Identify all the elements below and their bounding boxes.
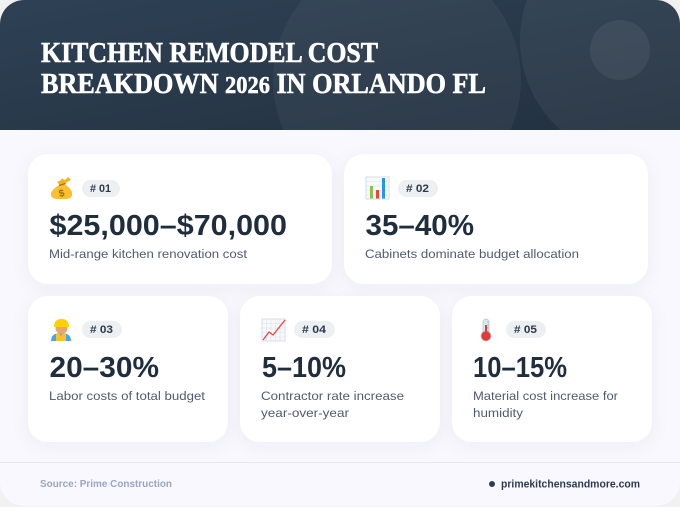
stat description: Mid-range kitchen renovation cost — [49, 247, 248, 261]
title: BREAKDOWN 2026 IN ORLANDO FL — [41, 69, 486, 100]
title: KITCHEN REMODEL COST — [41, 38, 378, 69]
panel: card 01 — [50, 177, 304, 284]
icon: construction worker — [51, 319, 71, 341]
badge 03 — [82, 321, 122, 338]
stat description: Contractor rate increase — [261, 389, 404, 403]
source note: Source: Prime Construction — [40, 478, 172, 490]
website: primekitchensandmore.com — [501, 478, 640, 490]
stat value: 35–40% — [366, 210, 474, 242]
icon: bar chart — [366, 177, 389, 199]
stat description — [473, 389, 618, 420]
icon: money bag: $ — [58, 188, 66, 200]
stat description — [261, 389, 404, 420]
stat description: humidity — [473, 406, 524, 420]
stat description: Labor costs of total budget — [49, 389, 206, 403]
badge 01: # 01 — [90, 183, 111, 195]
icon: rising line chart — [262, 319, 285, 341]
title — [41, 42, 486, 94]
panel: card 02 — [366, 176, 620, 284]
badge 05 — [506, 321, 546, 338]
badge 05: # 05 — [514, 324, 537, 336]
icon: thermometer — [481, 319, 491, 341]
badge 02: # 02 — [406, 183, 429, 195]
stat description: year-over-year — [261, 406, 349, 420]
stat description: Material cost increase for — [473, 389, 618, 403]
footer bar — [0, 462, 680, 490]
panel: card 05 — [464, 296, 633, 442]
panel: card 04 — [252, 296, 428, 442]
header banner — [0, 0, 680, 130]
stat description: Cabinets dominate budget allocation — [365, 247, 579, 261]
badge 02 — [398, 180, 438, 197]
stat value: 10–15% — [473, 352, 567, 384]
stat value: $25,000–$70,000 — [50, 210, 287, 242]
badge 01 — [82, 180, 120, 197]
icon: money bag — [51, 177, 72, 200]
badge 03: # 03 — [90, 324, 113, 336]
stat value: 5–10% — [262, 352, 346, 384]
panel: card 03 — [44, 296, 216, 442]
stat value: 20–30% — [50, 352, 159, 384]
badge 04: # 04 — [302, 324, 327, 336]
badge 04 — [294, 321, 335, 338]
